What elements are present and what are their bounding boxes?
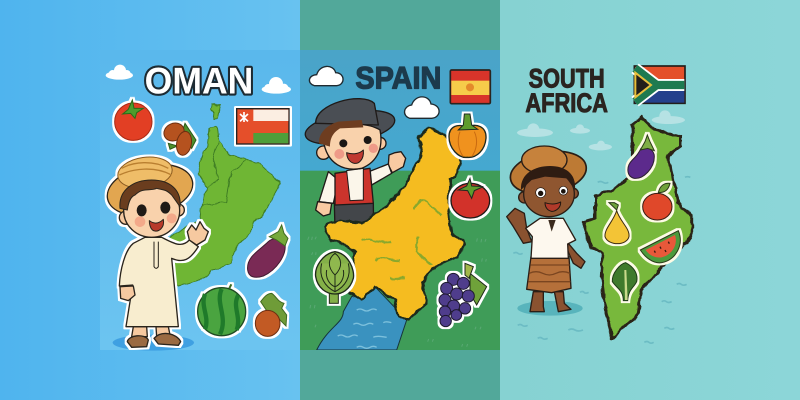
hat brim xyxy=(303,104,397,150)
water ripples xyxy=(513,177,690,343)
icon: eggplant xyxy=(248,225,288,277)
character: Spanish boy xyxy=(303,99,406,230)
legs xyxy=(530,292,571,312)
background: middle teal xyxy=(300,0,500,400)
shirt xyxy=(526,218,576,258)
character: Omani boy xyxy=(102,154,208,351)
title: SOUTH AFRICA: AFRICA xyxy=(525,88,608,118)
background: left blue xyxy=(0,0,300,400)
clouds xyxy=(517,110,685,150)
panel: Spain xyxy=(300,50,500,350)
flag: Spain xyxy=(450,70,490,104)
hat crown xyxy=(316,99,378,125)
background: right aqua xyxy=(500,0,800,400)
icon: leafy greens xyxy=(612,263,637,301)
cloud left xyxy=(309,66,343,86)
title: OMAN: OMAN xyxy=(145,59,253,101)
grass tufts xyxy=(308,237,486,347)
icon: grapes xyxy=(439,263,487,327)
icon: eggplant xyxy=(628,135,654,178)
shirt and vest xyxy=(335,168,373,205)
icon: tomato xyxy=(451,178,490,218)
hat brim xyxy=(507,146,590,200)
sleeves xyxy=(319,164,392,203)
panel: Oman xyxy=(100,50,300,351)
icon: artichoke xyxy=(316,252,354,303)
title: SPAIN: SPAIN xyxy=(355,61,441,96)
icon: apple xyxy=(643,183,672,220)
flag: South Africa xyxy=(634,66,685,103)
character: South African boy xyxy=(507,146,590,316)
panel: South Africa xyxy=(507,64,692,343)
map: Spain xyxy=(325,128,465,320)
icon: tamarillo xyxy=(255,293,287,336)
cloud middle xyxy=(405,97,439,118)
icon: watermelon xyxy=(198,284,246,336)
arm left xyxy=(507,208,532,243)
river ripples xyxy=(338,309,391,348)
map: Oman xyxy=(163,104,281,286)
hat crown xyxy=(522,146,567,174)
hand waving xyxy=(388,152,406,173)
figure xyxy=(102,154,208,347)
icon: dates xyxy=(161,120,196,156)
face xyxy=(519,192,530,203)
trousers xyxy=(334,203,374,230)
title: SOUTH AFRICA: SOUTH xyxy=(529,64,605,94)
shadow xyxy=(517,301,583,316)
title: SOUTH AFRICA xyxy=(525,64,608,118)
hand xyxy=(316,202,332,216)
shadow xyxy=(113,335,194,351)
arm right xyxy=(567,243,585,268)
map: South Africa xyxy=(583,117,692,338)
river xyxy=(317,287,407,350)
ground xyxy=(300,171,500,350)
clouds xyxy=(106,65,291,94)
flag: Oman xyxy=(234,106,292,147)
icon: pepper xyxy=(449,114,486,157)
sky xyxy=(300,50,500,172)
skirt xyxy=(527,257,571,293)
icon: tomato xyxy=(115,100,152,140)
icon: pear xyxy=(605,203,629,244)
face xyxy=(317,146,330,159)
icon: watermelon slice xyxy=(640,231,680,263)
